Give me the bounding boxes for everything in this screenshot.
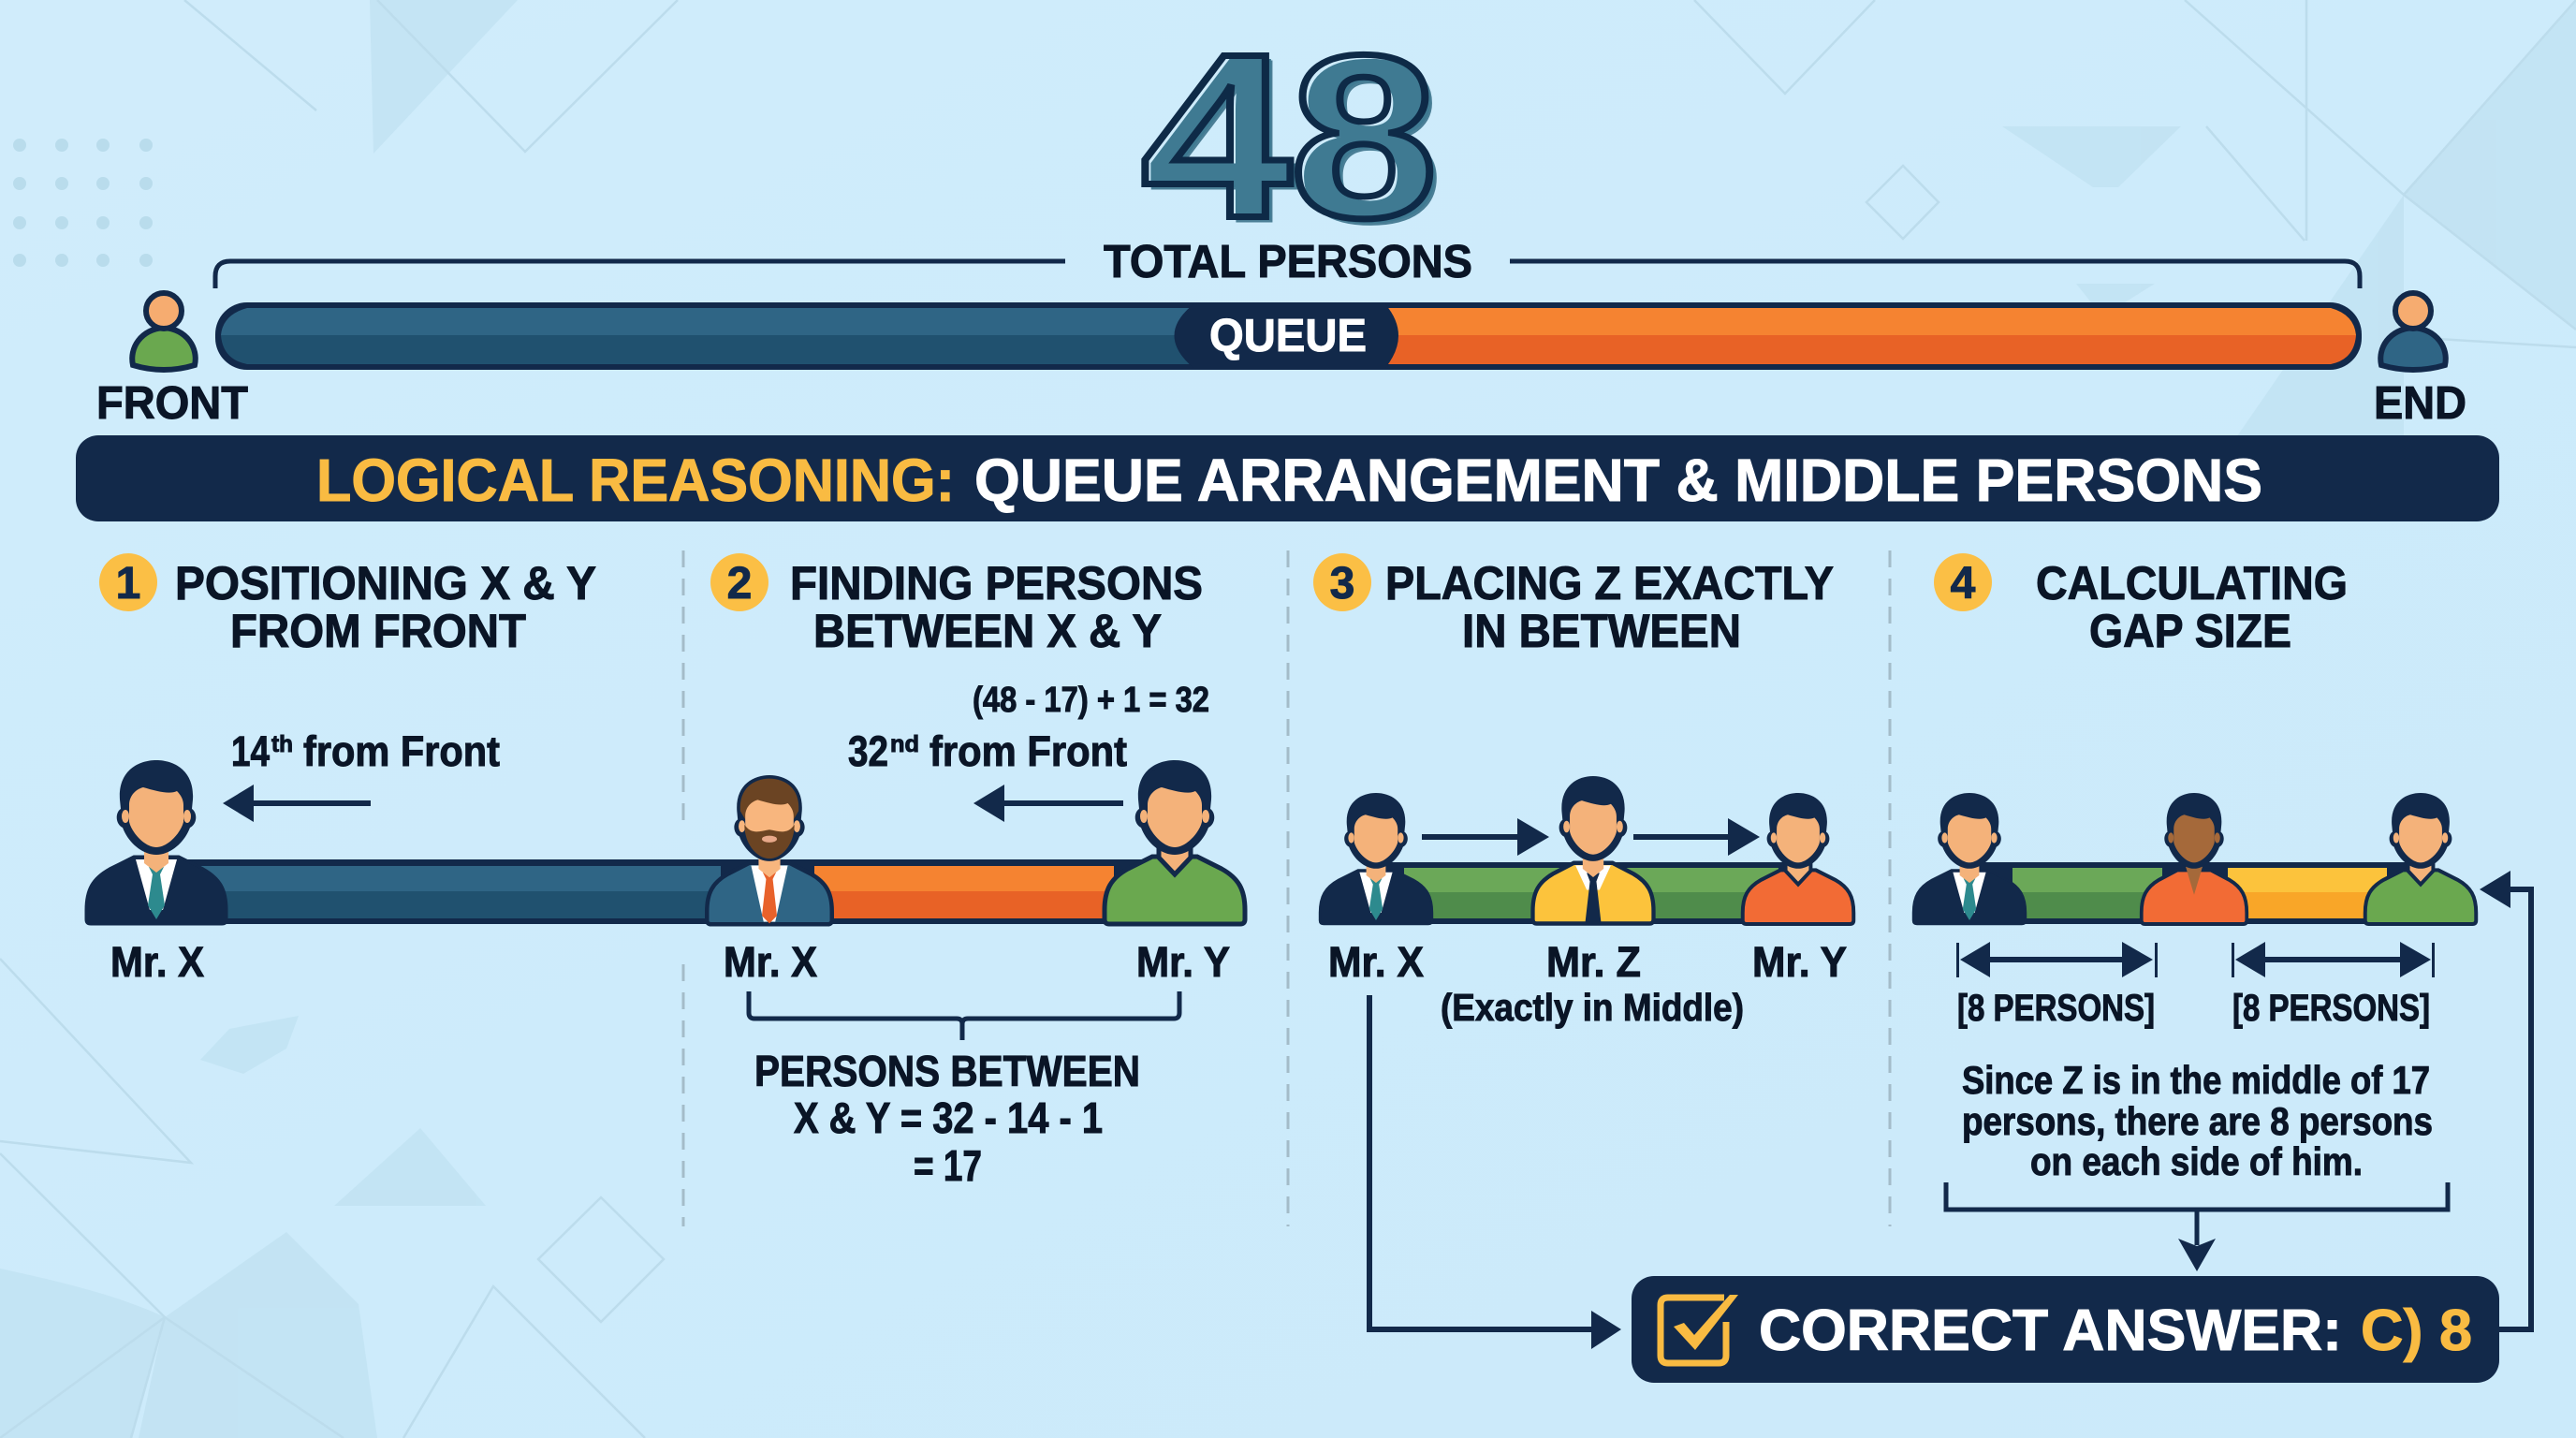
persons between calculation: X & Y = 32 - 14 - 1	[794, 1093, 1103, 1142]
answer value: C) 8	[2361, 1299, 2472, 1363]
label: Mr. Y: Mr. Y	[1752, 938, 1847, 986]
front label: FRONT	[96, 378, 248, 429]
big number 48: 8	[1295, 10, 1443, 271]
label: Mr. Z: Mr. Z	[1546, 938, 1641, 986]
label: 32nd from front	[848, 727, 1127, 775]
correct answer box	[1632, 1276, 2499, 1383]
bracket and arrow to answer	[1946, 1182, 2448, 1271]
connector arrow: Mr. X to answer	[1369, 995, 1621, 1349]
arrow: Z to Y	[1633, 818, 1760, 856]
queue segment bar	[1376, 862, 1798, 924]
step 3 heading: IN BETWEEN	[1462, 605, 1741, 657]
title banner	[76, 435, 2499, 521]
big number 48: 4	[1141, 6, 1292, 266]
label: 14th from front: 14	[231, 727, 270, 775]
step 4 badge: 4	[1951, 559, 1976, 609]
person: Mr. Z	[1533, 776, 1653, 923]
step 1 heading: POSITIONING X & Y	[175, 557, 596, 609]
explanation text: Since Z is in the middle of 17	[1962, 1058, 2430, 1102]
arrow: towards front	[973, 785, 1123, 822]
big number 48: 4	[1148, 10, 1298, 271]
label: Mr. X panel 2: Mr. X	[724, 938, 817, 986]
big number 48	[1141, 6, 1444, 272]
step 3 heading: PLACING Z EXACTLY	[1385, 557, 1834, 609]
step 3 badge: 3	[1330, 559, 1354, 609]
title yellow part: LOGICAL REASONING:	[316, 447, 955, 514]
explanation text: on each side of him.	[2030, 1139, 2363, 1183]
step 4 heading: CALCULATING	[2036, 557, 2348, 609]
persons between calculation: = 17	[914, 1141, 982, 1190]
total persons label: TOTAL PERSONS	[1104, 237, 1472, 287]
persons between calculation: PERSONS BETWEEN	[754, 1047, 1140, 1095]
label: 14th from front: from Front	[303, 727, 500, 775]
explanation text	[1962, 1058, 2433, 1183]
person: middle	[2142, 793, 2247, 924]
person: Mr. X	[1320, 793, 1432, 924]
label: Mr. Y panel 2: Mr. Y	[1136, 938, 1230, 986]
label: exactly in middle: (Exactly in Middle)	[1441, 986, 1744, 1029]
connector arrow: answer to queue bar	[2480, 871, 2531, 1329]
queue segment bar	[1969, 862, 2421, 924]
formula: (48 - 17) + 1 = 32	[973, 681, 1209, 720]
step 4 badge	[1934, 553, 1992, 611]
persons between calculation	[754, 1047, 1140, 1190]
brace between X and Y	[749, 991, 1179, 1040]
explanation text: persons, there are 8 persons	[1962, 1099, 2433, 1143]
label: 8 persons left: [8 PERSONS]	[1957, 988, 2155, 1029]
step 2 badge	[710, 553, 768, 611]
step 4 heading	[2036, 557, 2348, 657]
label: 14th from front	[231, 727, 500, 775]
front person icon	[132, 293, 196, 370]
step 1 heading	[175, 557, 596, 657]
label: 32nd from front: from Front	[929, 727, 1127, 775]
person: left	[1913, 793, 2026, 924]
person: Mr. Y	[1743, 793, 1853, 924]
panel 4: calculating gap size	[1913, 553, 2476, 1271]
step 2 heading: FINDING PERSONS	[790, 557, 1203, 609]
panel 1: positioning X and Y	[99, 553, 596, 822]
panel 3: placing Z	[1313, 553, 1853, 1029]
arrow: towards front	[223, 785, 371, 822]
step 4 heading: GAP SIZE	[2089, 605, 2291, 657]
person: Mr. X suit	[86, 760, 227, 924]
big number 48: 8	[1290, 6, 1438, 266]
title white part: QUEUE ARRANGEMENT & MIDDLE PERSONS	[974, 447, 2262, 514]
end person icon	[2380, 293, 2446, 370]
label: Mr. X: Mr. X	[1328, 938, 1424, 986]
big number 48: 8	[1296, 12, 1444, 272]
label: 32nd from front: 32	[848, 727, 888, 775]
label: 14th from front: th	[271, 731, 293, 757]
step 3 badge	[1313, 553, 1371, 611]
step 1 heading: FROM FRONT	[230, 605, 526, 657]
person: Mr. Y green	[1105, 760, 1245, 924]
end label: END	[2374, 378, 2466, 429]
person: bearded Mr. X	[707, 775, 832, 924]
icon: checkbox	[1661, 1295, 1738, 1363]
step 2 heading	[790, 557, 1203, 657]
step 3 heading	[1385, 557, 1834, 657]
step 1 badge: 1	[116, 559, 140, 609]
panel 2: queue bar with X and Y	[86, 553, 1245, 1190]
double arrow: left gap	[1956, 942, 2158, 977]
person: right	[2365, 793, 2476, 924]
label: Mr. X panel 1: Mr. X	[110, 938, 204, 986]
big number 48: 4	[1147, 8, 1297, 270]
step 2 heading: BETWEEN X & Y	[813, 605, 1162, 657]
step 2 badge: 2	[727, 559, 752, 609]
queue segment bar	[157, 859, 1175, 924]
total persons bracket	[215, 261, 2360, 288]
step 1 badge	[99, 553, 157, 611]
double arrow: right gap	[2232, 942, 2435, 977]
queue bar	[215, 302, 2362, 370]
label: 32nd from front: nd	[890, 731, 919, 757]
queue label: QUEUE	[1209, 311, 1367, 361]
label: 8 persons right: [8 PERSONS]	[2232, 988, 2430, 1029]
arrow: X to Z	[1422, 818, 1549, 856]
answer label: CORRECT ANSWER:	[1759, 1299, 2342, 1363]
